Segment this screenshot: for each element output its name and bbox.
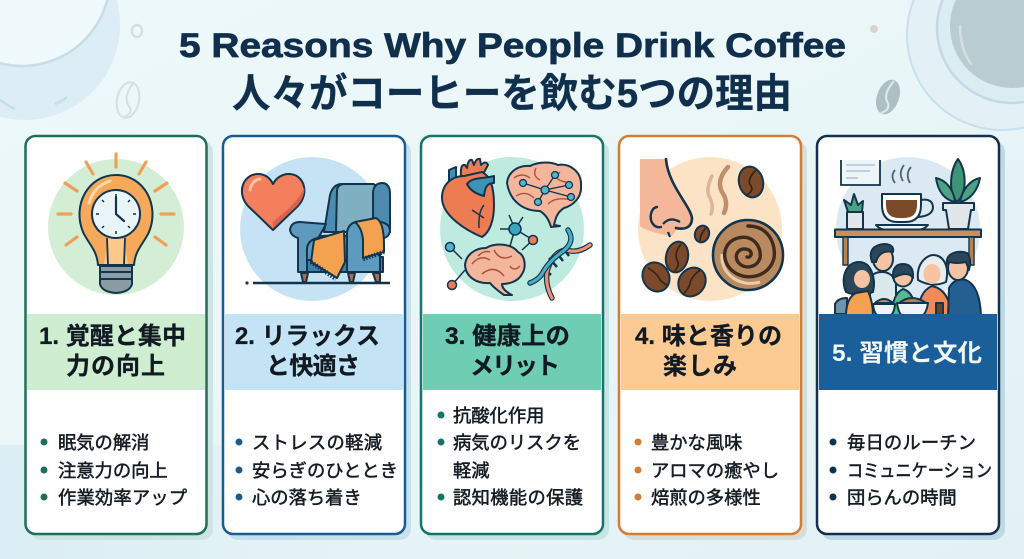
panel: 2 relaxation [223,136,411,540]
icon: coffee shelf and family [835,157,981,316]
bullet list [236,432,398,508]
father right [948,279,981,316]
bullet list: コミュニケーション [847,460,992,481]
bullet list: 眠気の解消 [58,432,149,453]
panel: 5 habit and culture [817,136,1005,540]
armchair [290,183,390,282]
decoration: saucer top left [0,0,143,120]
heart [449,167,456,190]
potted plant [951,159,965,202]
heading [235,323,380,380]
heading: メリット [470,353,560,380]
icon: heart and armchair [240,157,390,301]
decoration: coffee cup top right [870,0,1024,130]
bullet list: 安らぎのひととき [252,460,398,481]
molecule [450,215,533,285]
grandmother [918,255,947,285]
heading: 4. 味と香りの [635,323,782,350]
bullet list: ストレスの軽減 [252,432,382,453]
bullet list: 軽減 [453,460,490,481]
man in back [870,272,896,316]
title [179,27,846,116]
panel: 4 taste and aroma [619,136,807,540]
bullet list: アロマの癒やし [651,460,779,481]
bullet list: 作業効率アップ [58,487,187,508]
heading: 2. リラックス [235,323,380,350]
bullet list [438,405,583,508]
brain top [507,162,581,227]
child [892,289,916,316]
heading [635,323,782,380]
bullet list: 心の落ち着き [252,487,362,508]
heading band [27,314,205,390]
bullet list [634,432,779,508]
chair back [835,298,847,314]
heading: 力の向上 [66,353,165,380]
heading band [621,314,799,390]
bullet list: 豊かな風味 [651,432,742,453]
panel: 1 alertness [26,136,213,540]
heading [445,323,570,380]
heading: 楽しみ [663,353,737,380]
panel: 3 health [421,136,609,540]
coffee cup [892,165,911,183]
bullet list: 注意力の向上 [58,460,168,481]
icon: light bulb with clock [48,154,184,295]
shelf [835,230,981,237]
title: Japanese: 人々がコーヒーを飲む5つの理由 [232,72,792,116]
DNA [543,248,569,275]
heading [39,323,186,380]
heading band [423,314,601,390]
bullet list: 団らんの時間 [847,487,957,508]
bullet list: 認知機能の保護 [453,487,583,508]
heading: と快適さ [266,353,360,380]
bullet list [40,432,187,508]
bullet list [830,432,992,508]
heading: 1. 覚醒と集中 [39,323,186,350]
heading band [819,314,997,390]
bullet list: 毎日のルーチン [847,432,976,453]
bullet list: 病気のリスクを [453,432,581,453]
snack bowls and glass [875,299,893,303]
bullet list: 抗酸化作用 [453,405,544,426]
small plant [844,194,863,212]
family [835,244,981,316]
heading band [225,314,403,390]
brain bottom [465,245,525,295]
icon: heart, brains, molecule, DNA [440,157,590,301]
heading: 5. 習慣と文化 [832,340,982,367]
icon: nose, beans, swirl [637,157,783,302]
woman [844,262,874,295]
heading: 3. 健康上の [445,323,570,350]
title: English: 5 Reasons Why People Drink Coffee [179,27,846,65]
bullet list: 焙煎の多様性 [651,487,761,508]
